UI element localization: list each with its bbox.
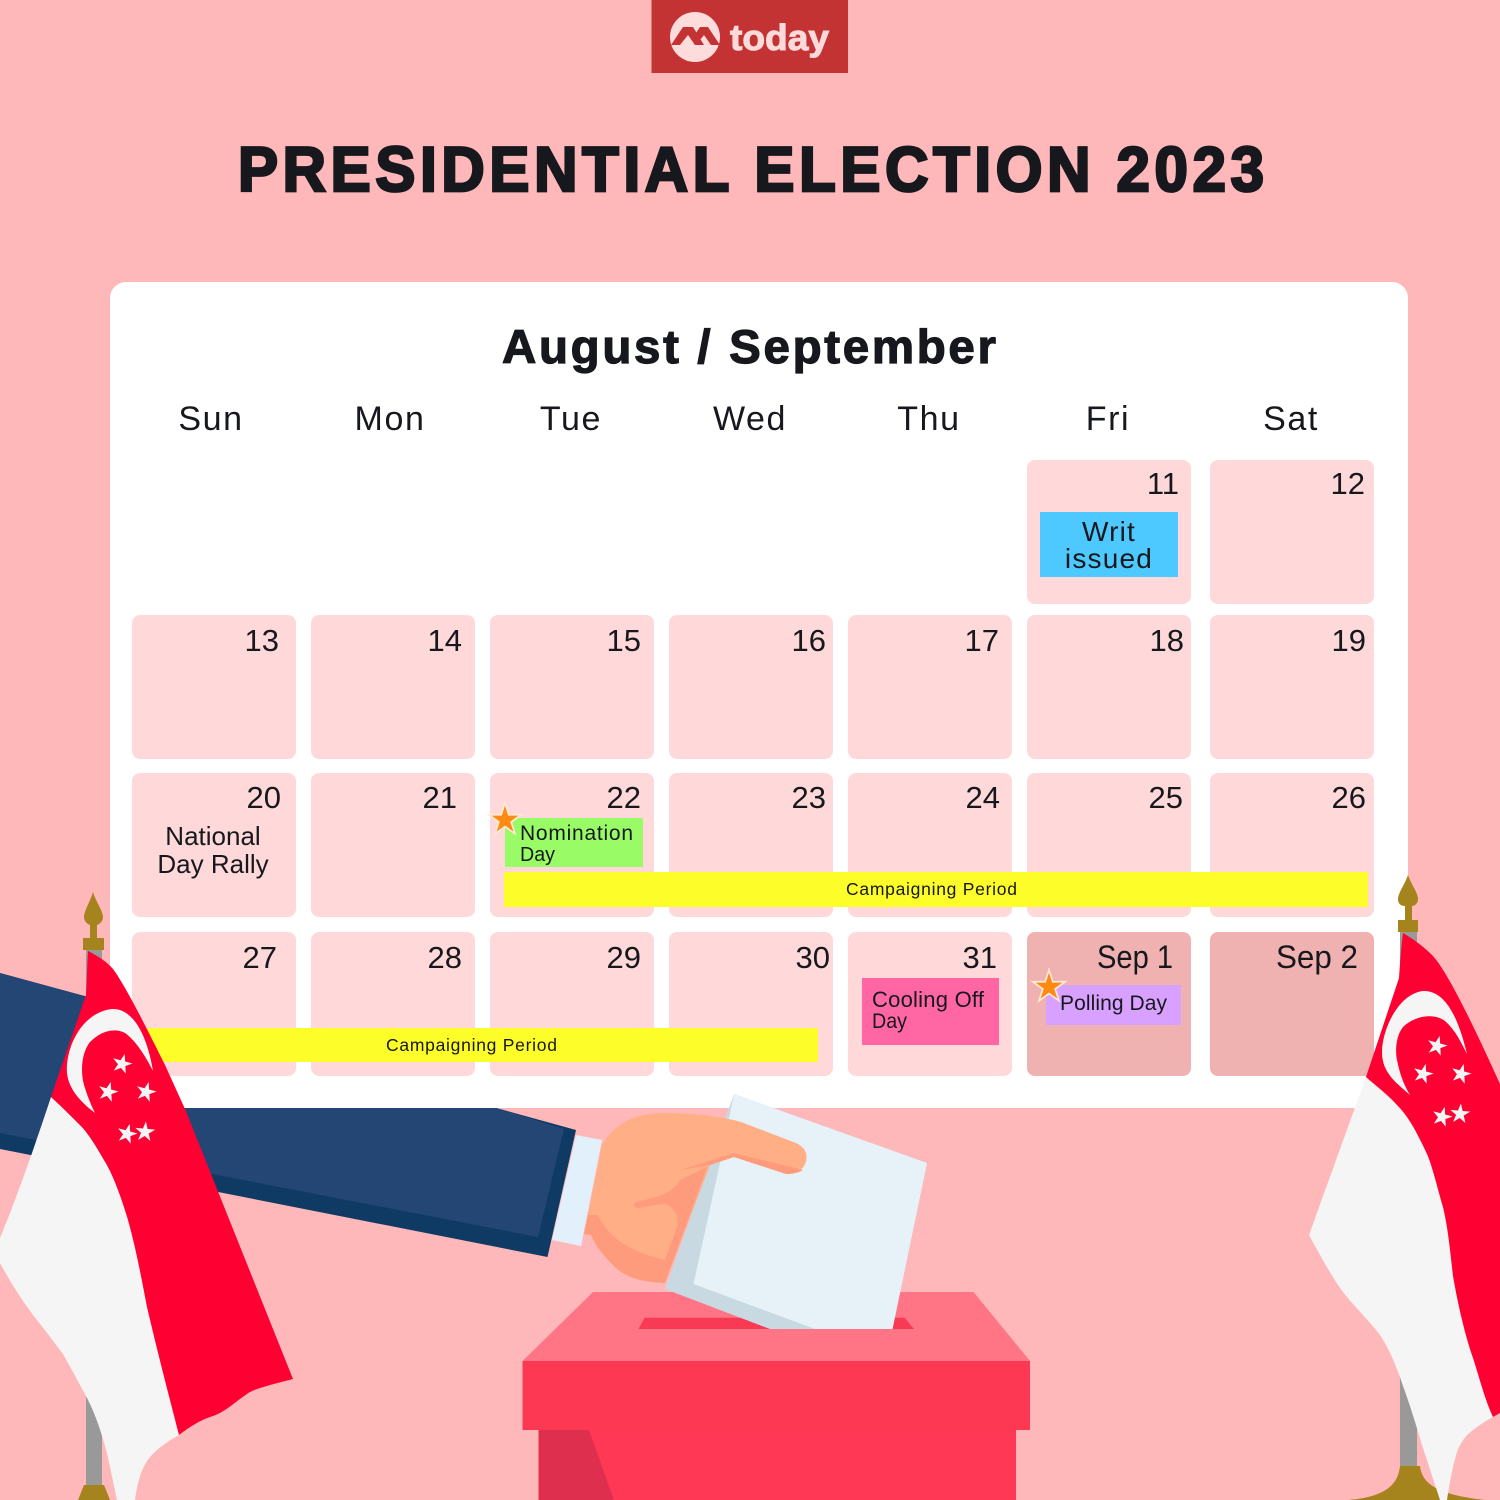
illustration: ballot paper	[665, 1094, 927, 1329]
icon: star, polling day	[1033, 970, 1065, 1001]
date numbers: 30	[796, 940, 830, 975]
event: national day rally: National	[165, 821, 261, 851]
date numbers: 25	[1149, 780, 1183, 815]
date numbers: 14	[428, 623, 462, 658]
event: cooling off day: Day	[872, 1010, 907, 1033]
date numbers: 21	[423, 780, 457, 815]
weekday headings: Tue	[540, 400, 602, 438]
icon: right flag stand	[1348, 875, 1485, 1500]
date numbers: 31	[963, 940, 997, 975]
date numbers: 23	[792, 780, 826, 815]
calendar grid: date cells	[132, 460, 1374, 1076]
title: PRESIDENTIAL ELECTION 2023	[238, 135, 1264, 205]
illustration: ballot box	[522, 1292, 1030, 1500]
illustration: arm in suit sleeve	[0, 973, 602, 1257]
date numbers: 26	[1332, 780, 1366, 815]
bar: campaigning period, week of 22 August: Campaigning Period	[846, 879, 1017, 899]
date numbers: 28	[428, 940, 462, 975]
event: polling day: Polling Day	[1060, 992, 1168, 1015]
date numbers	[243, 466, 1366, 975]
date numbers: 22	[607, 780, 641, 815]
weekday headings: Sun	[178, 400, 244, 438]
date numbers: 27	[243, 940, 277, 975]
event: nomination day	[505, 818, 643, 867]
icon: right Singapore flag	[1309, 933, 1500, 1500]
logo: today	[652, 0, 848, 73]
weekday headings: Fri	[1086, 400, 1130, 438]
panel: calendar card	[110, 282, 1408, 1108]
icon: star, nomination day	[489, 803, 521, 834]
date numbers: 17	[965, 623, 999, 658]
weekday headings: Wed	[713, 400, 787, 438]
date numbers: 19	[1332, 623, 1366, 658]
date numbers: 12	[1331, 466, 1365, 501]
event: nomination day: Nomination	[520, 822, 633, 845]
logo: today: today	[730, 17, 829, 58]
event: national day rally: Day Rally	[157, 849, 269, 879]
date numbers: 29	[607, 940, 641, 975]
date numbers: Sep 2	[1276, 939, 1358, 975]
date numbers: 20	[247, 780, 281, 815]
date numbers: 24	[966, 780, 1000, 815]
icon: left Singapore flag	[0, 951, 293, 1500]
date numbers: 15	[607, 623, 641, 658]
calendar heading: August / September	[502, 321, 996, 374]
event: nomination day: Day	[520, 844, 555, 866]
bar: campaigning period, week of 27 August: Campaigning Period	[386, 1035, 557, 1055]
weekday headings: Sat	[1263, 400, 1319, 438]
date numbers: 16	[792, 623, 826, 658]
date numbers: 13	[245, 623, 279, 658]
event: writ issued: Writ	[1082, 516, 1136, 547]
event: writ issued: issued	[1065, 543, 1153, 574]
illustration: hand holding ballot	[584, 1113, 807, 1283]
icon: left flag stand	[78, 892, 110, 1500]
date numbers: Sep 1	[1097, 939, 1173, 975]
bar: campaigning period, week of 27 August	[140, 1028, 818, 1062]
event: polling day	[1046, 985, 1181, 1025]
event: cooling off day	[862, 978, 999, 1045]
weekday headings: Thu	[897, 400, 961, 438]
date numbers: 18	[1150, 623, 1184, 658]
event: cooling off day: Cooling Off	[872, 987, 985, 1012]
date numbers: 11	[1147, 466, 1179, 501]
weekday headings: Mon	[355, 400, 425, 438]
event: national day rally	[157, 821, 269, 879]
bar: campaigning period, week of 22 August	[504, 872, 1368, 907]
weekday headings	[178, 400, 1319, 438]
event: writ issued	[1040, 512, 1178, 577]
